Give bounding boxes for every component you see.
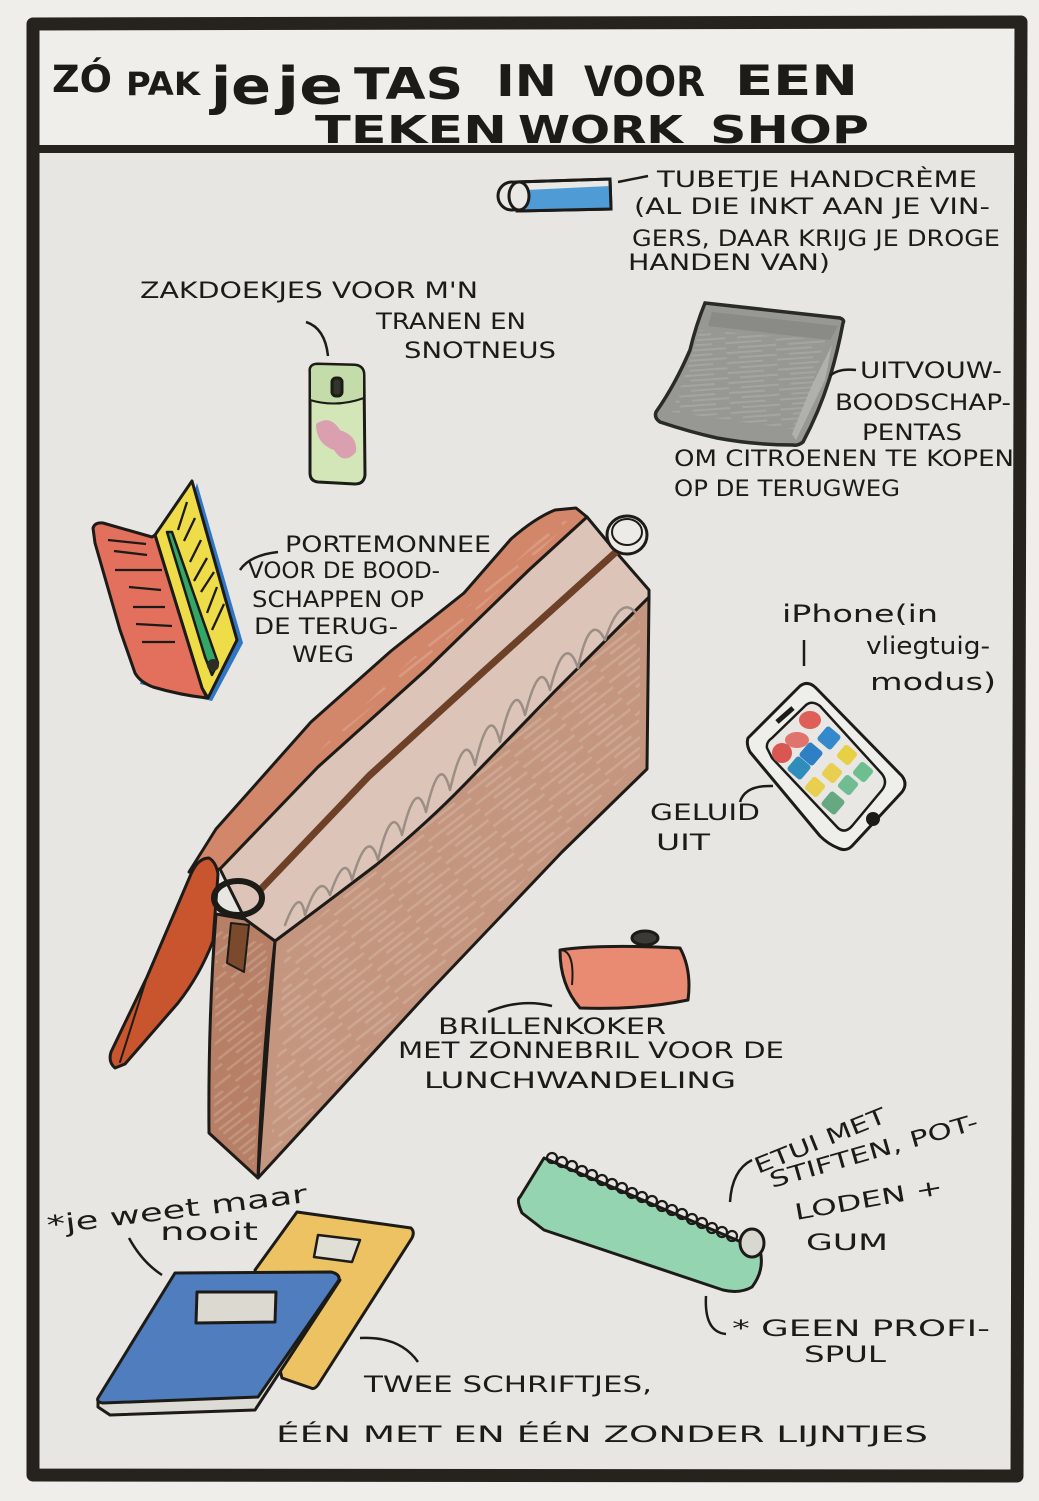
title: je <box>209 57 271 117</box>
label: glasses case: MET ZONNEBRIL VOOR DE <box>398 1039 784 1064</box>
label: sound off: UIT <box>656 831 711 856</box>
label: sound off: GELUID <box>650 801 760 826</box>
label: not professional: * GEEN PROFI- <box>732 1317 990 1342</box>
label: tissues <box>140 279 556 364</box>
top middle panel with zipper <box>220 517 649 941</box>
label: glasses case <box>398 1003 784 1094</box>
label: tissues: ZAKDOEKJES VOOR M'N <box>140 279 478 304</box>
label: wallet: DE TERUG- <box>254 615 398 640</box>
label: wallet: PORTEMONNEE <box>285 533 491 558</box>
label: shopping bag: BOODSCHAP- <box>835 391 1011 416</box>
label: glasses case: BRILLENKOKER <box>438 1015 666 1040</box>
label: wallet: WEG <box>292 643 354 668</box>
label: you never know: nooit <box>160 1217 258 1246</box>
label: pens and pencils: LODEN + <box>793 1175 945 1226</box>
title: IN <box>496 56 557 107</box>
icon: glasses case <box>560 931 689 1008</box>
item: phone <box>650 600 996 856</box>
label: shopping bag: UITVOUW- <box>860 359 1002 384</box>
central illustration: big pencil case <box>110 508 649 1178</box>
top orange panel <box>189 508 587 872</box>
label: iPhone: vliegtuig- <box>866 632 990 660</box>
icon: open wallet <box>93 481 243 701</box>
label: glasses case: LUNCHWANDELING <box>424 1069 736 1094</box>
zipper pull back <box>607 516 647 554</box>
icon: green pencil case <box>518 1153 764 1291</box>
label: pens and pencils: GUM <box>806 1231 888 1256</box>
label: hand cream: TUBETJE HANDCRÈME <box>656 167 977 193</box>
label: not professional <box>706 1296 990 1368</box>
zipper pull front <box>214 881 262 972</box>
label: wallet: SCHAPPEN OP <box>252 588 424 613</box>
label: tissues: SNOTNEUS <box>404 339 556 364</box>
label: pens and pencils: STIFTEN, POT- <box>767 1110 981 1194</box>
flap <box>110 858 218 1068</box>
title: je <box>275 57 343 117</box>
title: WORK <box>518 108 685 152</box>
title: PAK <box>126 65 201 103</box>
title: TAS <box>354 59 463 110</box>
label: hand cream: HANDEN VAN) <box>628 251 830 276</box>
label: you never know: *je weet maar <box>45 1179 310 1240</box>
title: ZÓ <box>52 57 112 101</box>
icon: tube of hand cream <box>498 179 611 211</box>
label: two notebooks <box>276 1338 928 1448</box>
item: wallet <box>93 481 491 701</box>
label: hand cream <box>618 167 1000 276</box>
item: foldable shopping bag <box>656 303 1014 502</box>
item: hand cream <box>498 167 1000 276</box>
label: sound off <box>650 786 773 856</box>
label: hand cream: (AL DIE INKT AAN JE VIN- <box>634 195 990 220</box>
item: tissues <box>140 279 556 484</box>
label: shopping bag: PENTAS <box>862 421 962 446</box>
label: two notebooks: TWEE SCHRIFTJES, <box>363 1373 652 1398</box>
icon: yellow notebook <box>255 1212 413 1389</box>
label: wallet <box>240 533 491 668</box>
label: wallet: VOOR DE BOOD- <box>248 559 440 584</box>
title: VOOR <box>584 57 705 106</box>
title <box>52 56 869 152</box>
label: not professional: SPUL <box>804 1343 887 1368</box>
item: glasses case <box>398 931 784 1094</box>
item: notebooks <box>45 1179 928 1448</box>
title: EEN <box>735 56 858 105</box>
icon: tissue pack <box>310 364 365 484</box>
title: SHOP <box>710 108 869 152</box>
label: hand cream: GERS, DAAR KRIJG JE DROGE <box>632 227 1000 252</box>
label: shopping bag <box>674 359 1014 502</box>
label: pens and pencils <box>730 1104 981 1256</box>
icon: blue notebook <box>98 1272 340 1415</box>
zipper <box>260 552 616 890</box>
label: iPhone: iPhone(in <box>782 600 938 628</box>
label: two notebooks: ÉÉN MET EN ÉÉN ZONDER LIJNTJES <box>276 1422 928 1448</box>
label: tissues: TRANEN EN <box>375 310 526 335</box>
side panel <box>258 597 649 1178</box>
item: pencil case <box>518 1104 990 1368</box>
title: TEKEN <box>315 108 507 152</box>
grey scribbles on the zipper panel <box>285 607 635 925</box>
label: shopping bag: OP DE TERUGWEG <box>674 477 900 502</box>
label: iPhone: modus) <box>870 668 996 696</box>
label: you never know <box>45 1179 310 1275</box>
icon: folded grey bag <box>656 303 844 445</box>
icon: phone with app tiles <box>747 683 905 850</box>
label: iPhone <box>782 600 996 696</box>
label: shopping bag: OM CITROENEN TE KOPEN <box>674 447 1014 472</box>
front end <box>209 914 275 1178</box>
label: pens and pencils: ETUI MET <box>751 1104 891 1180</box>
